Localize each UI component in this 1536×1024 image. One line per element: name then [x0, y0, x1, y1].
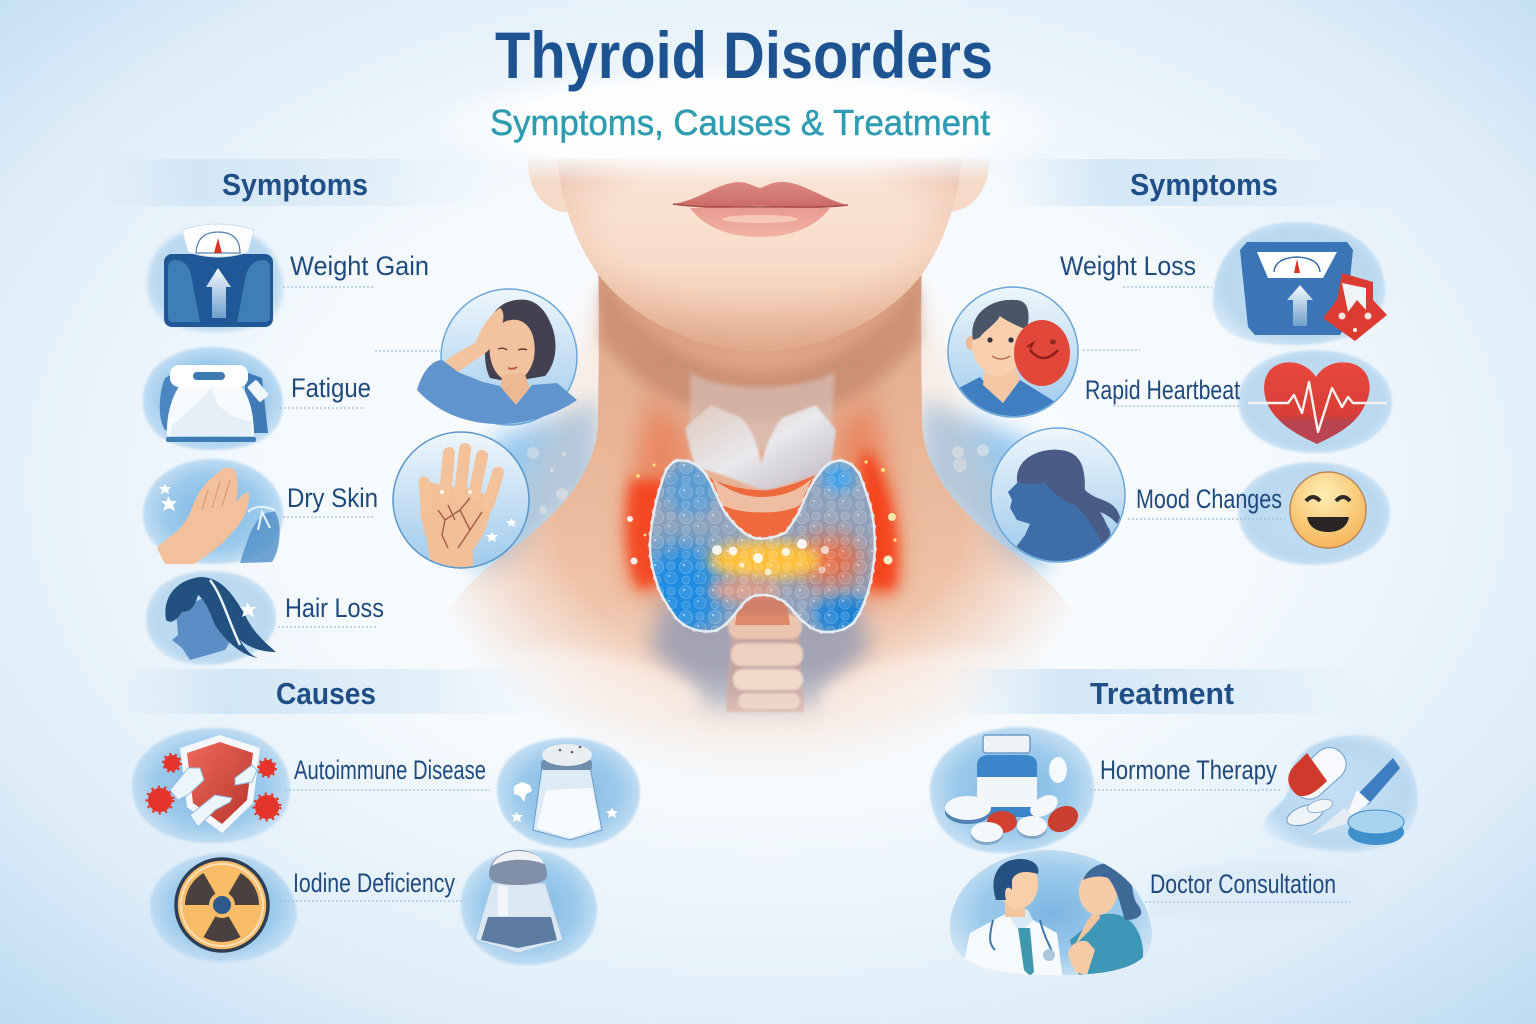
icon: salt shaker	[497, 738, 640, 848]
header: treatment: Treatment	[1090, 676, 1234, 711]
under-chin shadow	[600, 280, 920, 420]
header: right symptoms	[1010, 159, 1420, 206]
icon: pepper shaker	[461, 850, 597, 965]
label: mood changes: Mood Changes	[1136, 484, 1282, 514]
thyroid gland	[648, 458, 878, 634]
collarbones	[540, 653, 700, 703]
icon: doctor consultation	[950, 850, 1152, 975]
larynx behind thyroid	[705, 475, 815, 545]
header: right symptoms: Symptoms	[1130, 167, 1278, 202]
icon: pills and bottle	[930, 727, 1094, 853]
icon: cracked hand	[393, 432, 529, 570]
label: autoimmune disease: Autoimmune Disease	[294, 755, 486, 785]
icon: capsule and scalpel	[1263, 735, 1418, 852]
icon: happy face	[1238, 462, 1390, 565]
label: weight loss: Weight Loss	[1060, 251, 1196, 281]
label: doctor consultation: Doctor Consultation	[1150, 869, 1336, 899]
icon: autoimmune shield	[132, 728, 290, 843]
label: fatigue	[280, 373, 371, 408]
header: treatment	[950, 669, 1410, 714]
header: left symptoms: Symptoms	[222, 167, 368, 202]
header: causes	[120, 669, 560, 714]
label: hormone therapy: Hormone Therapy	[1100, 755, 1277, 785]
icon: dry skin	[143, 459, 283, 564]
face	[527, 158, 990, 351]
header: left symptoms	[100, 159, 490, 206]
header: causes: Causes	[276, 676, 376, 711]
trachea	[726, 610, 804, 712]
thyroid cartilage	[685, 372, 836, 490]
icon: fatigue	[143, 347, 283, 450]
blue haze behind neck	[470, 400, 1050, 570]
label: rapid heartbeat: Rapid Heartbeat	[1085, 375, 1240, 405]
title: Thyroid Disorders	[495, 18, 993, 92]
label: weight gain: Weight Gain	[290, 251, 429, 281]
neck and shoulders	[454, 274, 1066, 760]
label: dry skin: Dry Skin	[287, 483, 378, 513]
icon: hair loss	[146, 571, 276, 665]
title glow	[415, 63, 1075, 187]
subtitle: Symptoms, Causes & Treatment	[490, 102, 990, 143]
central neck illustration	[454, 158, 1066, 760]
red inflammation glow	[626, 400, 901, 610]
icon: mood silhouette	[991, 428, 1125, 565]
icon: heart	[1238, 350, 1392, 453]
icon: radiation symbol	[150, 853, 297, 962]
icon: woman with headache	[375, 289, 577, 425]
label: hair loss: Hair Loss	[285, 593, 384, 623]
lips	[673, 182, 848, 237]
label: iodine deficiency: Iodine Deficiency	[293, 868, 455, 898]
label: fatigue: Fatigue	[291, 373, 371, 403]
icon: man with balloon face	[948, 287, 1140, 425]
icon: weight loss scale	[1213, 222, 1387, 345]
muscle shading	[650, 590, 870, 710]
icon: weight gain scale	[147, 224, 283, 332]
